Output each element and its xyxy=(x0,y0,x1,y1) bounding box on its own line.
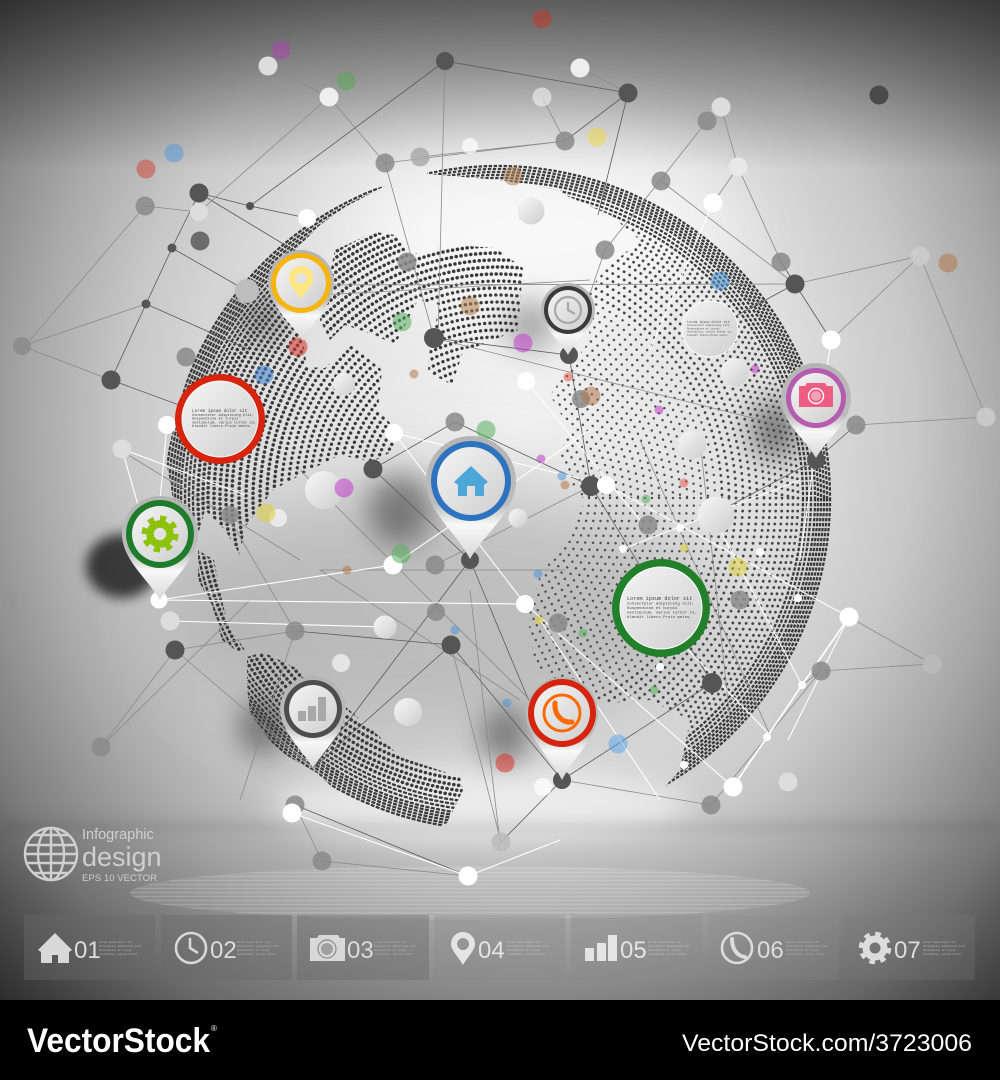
lorem text: Lorem ipsum dolor sit xyxy=(627,596,692,602)
text circle: plain xyxy=(682,301,738,357)
legend item 02: Suspendisse et turpis xyxy=(237,948,270,952)
globe xyxy=(86,166,830,830)
legend item 05: Consectetur adipiscing elit xyxy=(648,944,690,948)
legend item 05: Suspendisse et turpis xyxy=(648,948,681,952)
legend item 06: Consectetur adipiscing elit xyxy=(786,944,828,948)
legend item 02: 02 xyxy=(210,937,237,964)
legend item 03: 03 xyxy=(347,937,374,964)
footer band xyxy=(0,1000,1000,1080)
legend item 06: 06 xyxy=(757,937,784,964)
legend item 06 xyxy=(708,915,839,980)
legend item 04: Lorem ipsum dolor sit xyxy=(507,940,540,944)
legend item 03: Suspendisse et turpis xyxy=(374,948,407,952)
icon: bars xyxy=(298,697,326,721)
lorem text: Suspendisse et turpis xyxy=(687,326,720,330)
lorem text: Suspendisse et turpis xyxy=(192,417,238,422)
lorem text: Lorem ipsum dolor sit xyxy=(192,409,248,414)
shaded balls xyxy=(235,198,749,726)
image id: VectorStock.com/3723006 xyxy=(682,1030,972,1057)
legend item 04: 04 xyxy=(478,937,505,964)
legend item 01 xyxy=(24,915,155,980)
heading: Infographic xyxy=(82,827,154,843)
icon: clock xyxy=(176,933,206,963)
dotted continents: right land mass xyxy=(427,164,832,786)
icon: phone xyxy=(544,695,580,731)
text circle: red xyxy=(175,374,265,464)
icon: camera xyxy=(799,383,833,407)
icon: phone xyxy=(722,933,752,963)
icon: camera xyxy=(310,935,345,961)
registered mark: ® xyxy=(211,1024,217,1033)
lorem text: vestibulum, varius tortor in, xyxy=(627,610,697,616)
white and light nodes xyxy=(112,56,858,886)
icon: map marker xyxy=(289,266,313,299)
legend item 02: Consectetur adipiscing elit xyxy=(237,944,279,948)
legend item 07: 07 xyxy=(894,937,921,964)
legend item 02 xyxy=(161,915,292,980)
legend item 03: Consectetur adipiscing elit xyxy=(374,944,416,948)
legend item 02: Lorem ipsum dolor sit xyxy=(237,940,270,944)
icon: gear xyxy=(862,934,888,962)
lorem text: Consectetur adipiscing elit, xyxy=(687,323,731,327)
pin: location, yellow xyxy=(268,250,334,341)
dark network lines xyxy=(111,61,856,876)
lorem text: vestibulum, varius tortor in, xyxy=(687,330,732,334)
legend item 03: vestibulum, varius tortor xyxy=(374,952,413,956)
pin: gear, green xyxy=(122,496,198,600)
lorem text: blandit libero.Proin metus. xyxy=(627,615,692,620)
gray nodes xyxy=(1,112,996,870)
legend item 07: Lorem ipsum dolor sit xyxy=(923,940,956,944)
legend item 04: vestibulum, varius tortor xyxy=(507,952,546,956)
lorem text: vestibulum, varius tortor in, xyxy=(192,420,256,425)
icon: home xyxy=(38,933,72,963)
legend item 07: vestibulum, varius tortor xyxy=(923,952,962,956)
legend item 04: Consectetur adipiscing elit xyxy=(507,944,549,948)
legend item 02: vestibulum, varius tortor xyxy=(237,952,276,956)
dark nodes xyxy=(102,52,888,789)
gray network lines xyxy=(22,61,986,876)
icon: marker xyxy=(451,932,475,965)
heading: design xyxy=(82,842,162,872)
legend item 05: Lorem ipsum dolor sit xyxy=(648,940,681,944)
legend item 06: Suspendisse et turpis xyxy=(786,948,819,952)
icon: wireframe globe xyxy=(25,828,77,880)
brand name: VectorStock xyxy=(27,1022,210,1060)
pin: home, blue xyxy=(426,436,516,559)
legend item 07 xyxy=(844,915,975,980)
lorem text: blandit libero.Proin metus. xyxy=(192,424,252,429)
logo: infographic design xyxy=(25,827,162,884)
pin: clock, gray xyxy=(541,283,595,355)
heading: EPS 10 VECTOR xyxy=(82,873,157,884)
lorem text: Lorem ipsum dolor sit xyxy=(687,320,730,325)
pin: camera, purple xyxy=(781,363,851,458)
legend item 05 xyxy=(571,915,702,980)
legend item 03: Lorem ipsum dolor sit xyxy=(374,940,407,944)
pin: bar chart, gray xyxy=(280,676,346,768)
translucent colour nodes xyxy=(136,10,958,772)
lorem text: Consectetur adipiscing elit, xyxy=(627,602,694,606)
legend item 01: vestibulum, varius tortor xyxy=(99,952,138,956)
legend item 04: Suspendisse et turpis xyxy=(507,948,540,952)
legend item 01: Consectetur adipiscing elit xyxy=(99,944,141,948)
legend item 04 xyxy=(434,915,565,980)
text circle: green xyxy=(612,559,710,657)
legend item 06: Lorem ipsum dolor sit xyxy=(786,940,819,944)
legend item 06: vestibulum, varius tortor xyxy=(786,952,825,956)
icon: gear xyxy=(144,518,176,550)
dotted continents: left and south land masses xyxy=(166,186,523,826)
lorem text: blandit libero.Proin metus. xyxy=(687,333,729,337)
icon: house xyxy=(454,466,488,496)
legend item 01: Lorem ipsum dolor sit xyxy=(99,940,132,944)
pin: phone, red xyxy=(526,677,598,780)
icon: bars xyxy=(585,935,617,961)
legend item 01: 01 xyxy=(74,937,101,964)
legend item 03 xyxy=(297,915,429,980)
floor reflection xyxy=(0,822,1000,920)
icon: clock xyxy=(555,297,581,323)
pin shadows xyxy=(86,294,799,763)
legend bar xyxy=(24,915,975,980)
legend item 01: Suspendisse et turpis xyxy=(99,948,132,952)
legend item 07: Suspendisse et turpis xyxy=(923,948,956,952)
legend item 05: 05 xyxy=(620,937,647,964)
bright network strands xyxy=(733,617,849,787)
white network lines xyxy=(122,203,849,876)
lorem text: Suspendisse et turpis xyxy=(627,606,678,611)
network lines xyxy=(22,61,986,876)
legend item 07: Consectetur adipiscing elit xyxy=(923,944,965,948)
lorem text: Consectetur adipiscing elit, xyxy=(192,413,254,418)
legend item 05: vestibulum, varius tortor xyxy=(648,952,687,956)
